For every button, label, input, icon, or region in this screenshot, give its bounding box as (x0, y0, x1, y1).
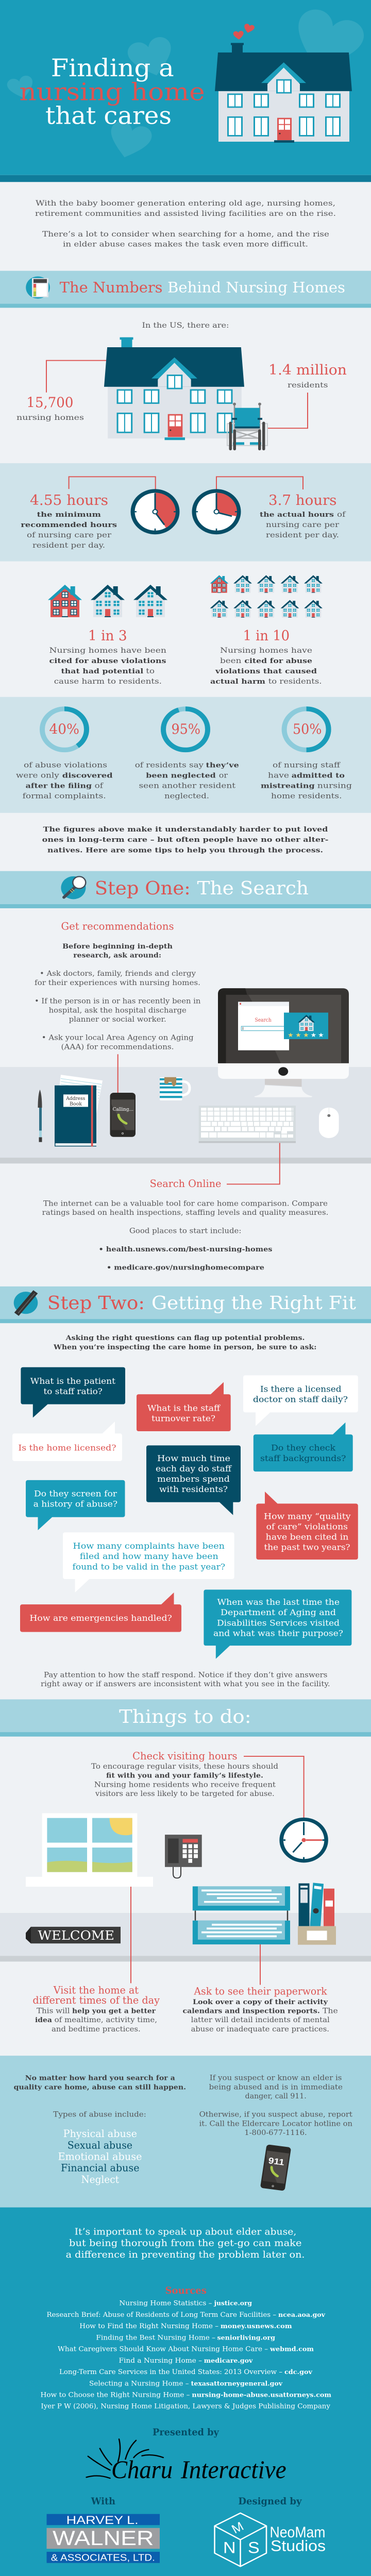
text block: check visiting hours: Check visiting hours (132, 1750, 238, 1762)
speech bubble: emergencies: How are emergencies handled? (29, 1614, 172, 1623)
chart: donut 95%: 95% (172, 721, 200, 737)
stat: 1 in 10: violations that caused (215, 668, 317, 675)
text: reporting advice: it. Call the Eldercare Locator hotline on (199, 2120, 352, 2128)
callout: 1.4 million residents: residents (288, 381, 328, 389)
panel: header (0, 0, 371, 182)
icon: magnifying glass (61, 876, 86, 899)
text: 50% description: have (268, 772, 289, 779)
panel: abuse percentages (0, 697, 371, 813)
text block: search online: Search Online (150, 1178, 221, 1190)
rating card: ★ (288, 1031, 294, 1039)
text: In the US: In the US, there are: (142, 321, 229, 330)
text: 95% description: been neglected (146, 772, 216, 779)
text: with: With (91, 2496, 115, 2507)
stat: 4.55 hours: of nursing care per (27, 532, 111, 539)
stat: 3.7 hours (260, 492, 346, 539)
callout: 1.4 million residents (267, 362, 347, 428)
panel: abuse can still happen (0, 2056, 371, 2208)
stat: 4.55 hours: the minimum (37, 511, 101, 519)
heading band: step two: Getting the Right Fit (151, 1292, 356, 1314)
text: 40% description: formal complaints. (23, 792, 106, 800)
text: abuse types: Financial abuse (61, 2162, 140, 2174)
heading band: step two (0, 1286, 371, 1323)
text block: ask to see paperwork (183, 1985, 338, 2033)
stat: 1 in 10: been (220, 657, 241, 665)
stat: 3.7 hours: the actual hours (260, 511, 334, 519)
logo: NeoMam Studios (214, 2513, 326, 2566)
browser window (238, 1002, 289, 1050)
speech bubble: department visit: Disabilities Services visited (217, 1618, 340, 1628)
text block: search online: The internet can be a valuable tool for care home comparison. Compare (43, 1200, 328, 1208)
text: sources (40, 2285, 331, 2411)
speech bubble: patient to staff ratio (21, 1367, 125, 1418)
speech bubble: department visit (204, 1589, 351, 1659)
logo: Harvey L. Walner: HARVEY L. (66, 2514, 139, 2527)
text: 95% description: they’ve (206, 761, 239, 769)
stat: 1 in 3: that had potential (61, 668, 143, 675)
text: abuse types: Types of abuse include: (53, 2111, 146, 2119)
text: abuse types: Physical abuse (63, 2128, 137, 2140)
icon: phone dialing 911: 911 (268, 2156, 285, 2167)
speech bubble: staff turnover (137, 1382, 231, 1431)
heading band: step one (0, 871, 371, 908)
speech bubble: staff turnover: turnover rate? (151, 1414, 215, 1423)
icon: keyboard (199, 1106, 296, 1143)
logo: NeoMam Studios: Studios (271, 2537, 326, 2554)
chart: clock 3.7 hours (194, 491, 239, 533)
icon: wall clock (281, 1819, 326, 1861)
text: 95% description: neglected. (164, 792, 209, 800)
icon: coffee mug (160, 1077, 190, 1100)
text block: introduction: in elder abuse cases makes the task even more difficult. (63, 241, 308, 249)
logo: Harvey L. Walner (46, 2514, 160, 2563)
speech bubble: quality of care violations: have been cited in (266, 1532, 349, 1541)
connector: paperwork line (260, 1944, 261, 1985)
text block: get recommendations: • If the person is in or has recently been in (35, 997, 200, 1005)
text block: search online: • health.usnews.com/best-nursing-homes (99, 1245, 273, 1253)
title (20, 55, 205, 130)
text block: ask to see paperwork: latter will detail incidents of mental (191, 2016, 330, 2024)
panel: footer (0, 2208, 371, 2576)
text: 40% description: of abuse violations (24, 761, 107, 769)
text: 50% description: nursing (317, 782, 352, 790)
text: sources: What Caregivers Should Know About Nursing Home Care – (58, 2345, 268, 2353)
text: abuse types: Emotional abuse (58, 2150, 142, 2162)
icon: address book (55, 1075, 103, 1146)
icon: nursing home building (104, 337, 244, 440)
text: sources: money.usnews.com (221, 2323, 292, 2330)
text: closing statement (66, 2227, 305, 2260)
text: sources: justice.org (214, 2300, 252, 2308)
logo: NeoMam Studios: M (229, 2519, 246, 2536)
text: sources: ncea.aoa.gov (278, 2311, 325, 2319)
text: sources: Find a Nursing Home – (119, 2357, 202, 2365)
text: reporting advice: If you suspect or know an elder is (210, 2074, 342, 2082)
text block: search online: Good places to start include: (129, 1227, 241, 1235)
rating card (284, 1012, 328, 1039)
speech bubble: quality of care violations: How many “quality (264, 1512, 351, 1521)
text: sources: How to Choose the Right Nursing Home – (40, 2391, 190, 2399)
heading band: the numbers (0, 271, 371, 308)
text: sources: Research Brief: Abuse of Residents of Long Term Care Facilities – (47, 2311, 276, 2319)
stat: 1 in 3: Nursing homes have been (49, 647, 166, 655)
text: reporting advice: 1-800-677-1116. (244, 2129, 307, 2137)
text: sources: Nursing Home Statistics – (119, 2299, 212, 2308)
text block: get recommendations: Before beginning in-depth (62, 942, 173, 951)
browser window: Search (255, 1016, 272, 1023)
speech bubble: staff backgrounds (254, 1422, 353, 1471)
connector: visiting hours line (244, 1756, 304, 1818)
text block: introduction (35, 200, 336, 249)
icon: welcome sign: WELCOME (38, 1928, 114, 1943)
speech bubble: staff backgrounds: staff backgrounds? (260, 1453, 346, 1463)
text: sources: Selecting a Nursing Home – (89, 2380, 189, 2387)
text: sources: Iyer P W (2006), Nursing Home Litigation, Lawyers & Judges Publishing Company (41, 2402, 330, 2411)
text: 95% description: or (219, 772, 228, 779)
text block: introduction: retirement communities and assisted living facilities are on the rise. (35, 210, 336, 218)
text: sources: How to Find the Right Nursing Home – (79, 2323, 218, 2330)
text block: introduction: There’s a lot to consider when searching for a home, and the rise (42, 230, 329, 239)
text: reporting advice: danger, call 911. (245, 2093, 307, 2100)
callout: 15,700 nursing homes: nursing homes (16, 414, 84, 422)
text: presented by: Presented by (153, 2427, 220, 2438)
chart: donut 50%: 50% (293, 721, 322, 737)
stat: 3.7 hours: resident per day. (266, 532, 339, 539)
stat: 3.7 hours: 3.7 hours (268, 492, 337, 509)
text: sources: webmd.com (269, 2346, 314, 2353)
rating card: ★ (311, 1031, 316, 1039)
speech bubble: history of abuse: Do they screen for (34, 1489, 117, 1498)
text block: ask to see paperwork: Ask to see their paperwork (194, 1985, 327, 1997)
stat: 1 in 3: cited for abuse violations (49, 657, 166, 665)
speech bubble: licensed doctor (243, 1375, 358, 1426)
logo: Charu Interactive: Interactive (180, 2456, 286, 2484)
text block: visit the home: Visit the home at (53, 1984, 139, 1996)
callout: 1.4 million residents: 1.4 million (268, 362, 347, 378)
text block: ask to see paperwork: The (323, 2007, 338, 2015)
title: that cares (45, 102, 172, 130)
text block: asking questions: Asking the right questions can flag up potential problems. (65, 1334, 305, 1342)
text: abuse types: Sexual abuse (68, 2139, 132, 2151)
chart: donut 95% (163, 709, 208, 750)
heading band: step one: Step One: (95, 877, 191, 899)
connector: phone line (117, 1054, 119, 1093)
chart: donut 40%: 40% (49, 721, 79, 737)
heading band: the numbers: Behind Nursing Homes (167, 279, 345, 296)
text block: get recommendations: (AAA) for recommendations. (61, 1043, 174, 1051)
icon: ruler (14, 1292, 38, 1314)
speech bubble: time with residents (146, 1446, 241, 1515)
rating card: ★ (318, 1031, 324, 1039)
speech bubble: department visit: When was the last time the (217, 1598, 340, 1607)
callout: 15,700 nursing homes: 15,700 (26, 395, 73, 411)
text block: search online: • medicare.gov/nursinghomecompare (107, 1264, 264, 1272)
title: nursing home (20, 78, 205, 106)
text block: get recommendations: • Ask your local Area Agency on Aging (42, 1034, 194, 1042)
text block: figures summary: The figures above make it understandably harder to put loved (43, 826, 328, 834)
text: abuse types: Neglect (81, 2174, 119, 2185)
icon: computer monitor (218, 988, 349, 1097)
panel: care hours (0, 463, 371, 562)
text: 95% description: of residents say (135, 761, 204, 769)
text block: check visiting hours: To encourage regular visits, these hours should (91, 1763, 278, 1771)
connector: search online line (227, 1143, 280, 1184)
speech bubble: time with residents: members spend (157, 1475, 230, 1484)
heading band: things to do: Things to do: (119, 1706, 251, 1727)
icon: desk telephone (165, 1835, 202, 1878)
text: closing statement: but being thorough from the get-go can make (69, 2238, 302, 2248)
text block: asking questions: When you’re inspecting the care home in person, be sure to ask: (53, 1343, 316, 1351)
text block: introduction: With the baby boomer generation entering old age, nursing homes, (36, 200, 335, 208)
text: sources: Long-Term Care Services in the United States: 2013 Overview – (59, 2368, 282, 2376)
text: 95% description (135, 761, 239, 800)
callout: 15,700 nursing homes (16, 361, 106, 422)
icon: phone dialing 911 (260, 2144, 291, 2191)
icon: mobile phone calling (110, 1093, 136, 1137)
panel: wall base (0, 1913, 371, 1961)
text block: visit the home: This will (37, 2007, 70, 2015)
text block: ask to see paperwork: Look over a copy of their activity (193, 1998, 328, 2006)
stat: 3.7 hours: of (337, 511, 346, 519)
text: abuse types: quality care home, abuse can still happen. (14, 2083, 186, 2091)
logo: Charu Interactive (87, 2439, 286, 2484)
icon: address book: Address (65, 1096, 85, 1101)
icon: paper trays (193, 1886, 290, 1944)
speech bubble: patient to staff ratio: What is the patient (30, 1377, 115, 1386)
stat: 4.55 hours: recommended hours (21, 521, 117, 529)
speech bubble: history of abuse (26, 1480, 125, 1530)
text: 40% description: of (95, 782, 104, 790)
logo: Charu Interactive: Charu (111, 2456, 173, 2484)
icon: window (26, 1813, 153, 1887)
stat: 1 in 3: cause harm to residents. (54, 677, 162, 686)
icon: binders and box (298, 1883, 336, 1945)
text block: pay attention: Pay attention to how the staff respond. Notice if they don’t give answers (44, 1671, 328, 1679)
logo: Harvey L. Walner: & ASSOCIATES, LTD. (51, 2553, 155, 2563)
rating card: ★ (303, 1031, 309, 1039)
icon: address book: Book (70, 1101, 82, 1107)
rating card: ★ (295, 1031, 301, 1039)
logo: NeoMam Studios: N (223, 2538, 236, 2556)
text block: pay attention (41, 1671, 330, 1688)
text: sources: nursing-home-abuse.usattorneys.com (192, 2392, 331, 2399)
icon: 1 in 10 houses (210, 575, 323, 618)
text: reporting advice (199, 2074, 352, 2137)
text block: figures summary (42, 826, 329, 854)
icon: 1 in 3 houses (48, 585, 167, 617)
text block: get recommendations (35, 920, 200, 1051)
heading band: step two: Step Two: (47, 1292, 145, 1314)
title: Finding a (51, 55, 174, 82)
speech bubble: time with residents: with residents? (159, 1485, 228, 1494)
chart: donut 50% (284, 709, 329, 750)
text block: get recommendations: Get recommendations (61, 920, 174, 932)
text: sources: cdc.gov (284, 2368, 312, 2376)
text: sources: seniorliving.org (217, 2334, 275, 2342)
speech bubble: complaints (63, 1532, 234, 1592)
text block: check visiting hours: Nursing home residents who receive frequent (94, 1781, 276, 1789)
text: 95% description: seen another resident (139, 782, 235, 790)
logo: Harvey L. Walner: WALNER (53, 2526, 154, 2549)
stat: 1 in 3: 1 in 3 (88, 628, 127, 644)
speech bubble: emergencies (20, 1592, 181, 1632)
text block: get recommendations: research, ask around: (73, 952, 161, 959)
text block: visit the home: help you get a better (72, 2007, 156, 2015)
icon: calculator (26, 276, 50, 299)
text block: visit the home: idea (35, 2016, 52, 2024)
stat: 1 in 3 (49, 628, 166, 686)
text block: check visiting hours: visitors are less likely to be targeted for abuse. (95, 1790, 275, 1798)
text block: visit the home: different times of the day (32, 1994, 160, 2006)
text: 50% description: mistreating (261, 782, 315, 790)
text: closing statement: a difference in preventing the problem later on. (66, 2249, 305, 2260)
text: designed by: Designed by (238, 2496, 302, 2507)
speech bubble: staff backgrounds: Do they check (271, 1443, 336, 1453)
speech bubble: complaints: How many complaints have been (73, 1541, 225, 1551)
stat: 1 in 10: Nursing homes have (220, 647, 312, 655)
speech bubble: licensed doctor: Is there a licensed (260, 1384, 342, 1394)
speech bubble: licensed doctor: doctor on staff daily? (253, 1395, 348, 1404)
stat: 1 in 10: cited for abuse (244, 657, 312, 665)
text block: asking questions (53, 1334, 316, 1351)
text block: get recommendations: for their experiences with nursing homes. (35, 979, 200, 987)
text: 50% description: of nursing staff (273, 761, 341, 769)
text: sources: texasattorneygeneral.gov (191, 2380, 282, 2387)
text: 40% description: after the filing (26, 782, 92, 790)
text: 50% description: admitted to (292, 772, 345, 779)
logo: NeoMam Studios: S (248, 2538, 260, 2556)
chart: clock 4.55 hours (133, 491, 177, 533)
text block: check visiting hours: fit with you and your family’s lifestyle. (106, 1772, 263, 1780)
text: 50% description: home residents. (271, 792, 342, 800)
icon: mobile phone calling: Calling... (113, 1107, 133, 1112)
heading band: things to do (0, 1699, 371, 1737)
text: sources: Sources (165, 2285, 207, 2296)
heading band: the numbers: The Numbers (60, 279, 163, 296)
text block: get recommendations: hospital, ask the hospital discharge (49, 1007, 187, 1014)
stat: 4.55 hours (21, 492, 117, 550)
text block: get recommendations: • Ask doctors, family, friends and clergy (40, 970, 196, 978)
speech bubble: department visit: and what was their purpose? (213, 1629, 343, 1638)
speech bubble: quality of care violations: of care” violations (266, 1522, 348, 1531)
text block: get recommendations: planner or social worker. (69, 1016, 166, 1024)
speech bubble: quality of care violations (256, 1492, 358, 1560)
icon: wheelchair (227, 402, 267, 450)
text: 40% description: discovered (62, 772, 113, 779)
text: 50% description (261, 761, 352, 800)
icon: house with hearts (215, 23, 352, 143)
text: abuse types: No matter how hard you search for a (25, 2074, 175, 2082)
icon: pen (38, 1090, 42, 1142)
speech bubble: time with residents: How much time (157, 1453, 230, 1463)
text: 40% description (16, 761, 113, 800)
speech bubble: staff turnover: What is the staff (147, 1403, 221, 1413)
text block: ask to see paperwork: calendars and inspection reports. (183, 2007, 320, 2015)
speech bubble: history of abuse: a history of abuse? (33, 1499, 117, 1509)
logo: NeoMam Studios: NeoMam (270, 2523, 326, 2541)
text: sources: Finding the Best Nursing Home – (96, 2334, 215, 2342)
text block: visit the home: of mealtime, activity time, (55, 2016, 157, 2024)
text: reporting advice: being abused and is in immediate (209, 2083, 343, 2091)
stat: 1 in 10 (210, 628, 322, 686)
icon: welcome sign (26, 1927, 121, 1943)
stat: 1 in 10: 1 in 10 (243, 628, 290, 644)
speech bubble: home licensed: Is the home licensed? (18, 1443, 116, 1452)
stat: 4.55 hours: 4.55 hours (30, 492, 108, 509)
text: reporting advice: Otherwise, if you suspect abuse, report (199, 2111, 352, 2119)
panel: desk (0, 1067, 371, 1163)
text block: visit the home: and bedtime practices. (52, 2025, 141, 2033)
speech bubble: complaints: found to be valid in the past year? (72, 1562, 225, 1571)
speech bubble: time with residents: each day do staff (156, 1464, 232, 1473)
speech bubble: complaints: filed and how many have been (80, 1552, 218, 1561)
text block: pay attention: right away or if answers are inconsistent with what you see in the facility. (41, 1681, 330, 1688)
text: closing statement: It’s important to speak up about elder abuse, (75, 2227, 296, 2237)
speech bubble: home licensed (12, 1421, 122, 1461)
text block: search online: ratings based on health inspections, staffing levels and quality measures. (42, 1209, 328, 1217)
text: 40% description: were only (16, 772, 60, 779)
chart: donut 40% (42, 709, 87, 750)
text block: figures summary: natives. Here are some tips to help you through the process. (47, 846, 323, 854)
connector: visit home line (130, 1887, 131, 1983)
speech bubble: quality of care violations: the past two years? (264, 1543, 350, 1552)
stat: 1 in 10: to residents. (268, 677, 322, 686)
text block: figures summary: ones in long-term care – but often people have no other alter- (42, 836, 329, 844)
text: abuse types (14, 2074, 186, 2185)
heading band: step one: The Search (197, 877, 309, 899)
speech bubble: patient to staff ratio: to staff ratio? (44, 1387, 103, 1396)
stat: 4.55 hours: resident per day. (32, 541, 105, 550)
stat: 1 in 3: to (146, 668, 155, 675)
text block: check visiting hours (91, 1750, 278, 1798)
text: sources: medicare.gov (204, 2357, 253, 2365)
stat: 3.7 hours: nursing care per (266, 521, 339, 529)
icon: mouse (319, 1108, 339, 1138)
text block: visit the home (32, 1984, 160, 2033)
stat: 1 in 10: actual harm (210, 677, 265, 686)
text block: ask to see paperwork: abuse or inadequate care practices. (191, 2025, 329, 2033)
text block: search online (42, 1178, 328, 1272)
speech bubble: department visit: Department of Aging and (221, 1608, 336, 1617)
